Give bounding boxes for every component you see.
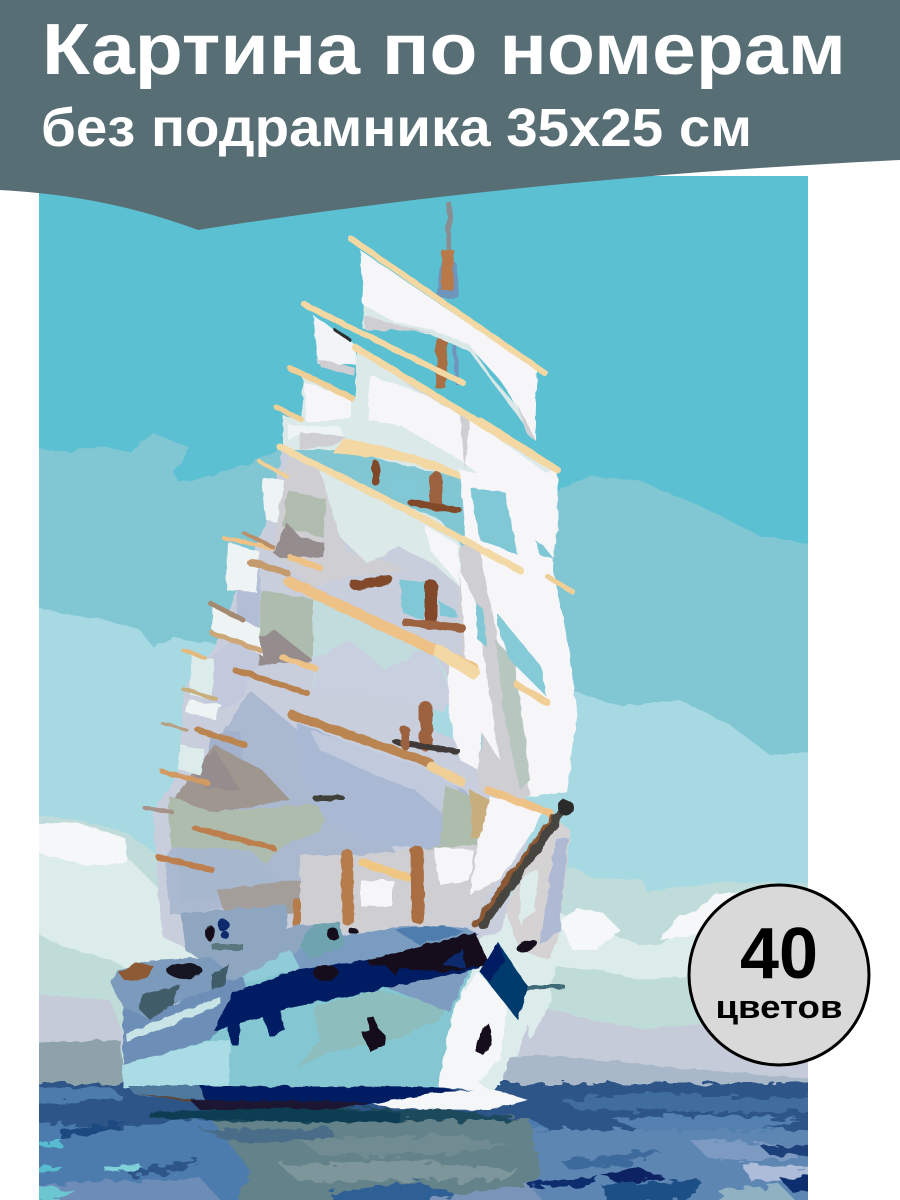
navy stripe on hull: [213, 935, 480, 1045]
yards: [145, 238, 573, 878]
badge: 40 colours: [689, 885, 869, 1065]
sky clouds: [20, 433, 825, 1100]
badge: 40 colours: 40: [740, 914, 818, 994]
anchors and portholes: [205, 919, 539, 1056]
bowsprit: [475, 800, 574, 925]
gaps of sky through the sails: [393, 473, 555, 750]
hull light blue body: [123, 960, 477, 1088]
navy bow panel: [480, 942, 565, 1020]
ship: [110, 202, 577, 1122]
subtitle: без подрамника 35х25 см: [41, 98, 752, 158]
stern: [110, 944, 243, 1020]
black rail section: [313, 932, 490, 981]
central sail one: [273, 457, 460, 587]
right hanging white sails: [455, 470, 577, 810]
central sail two: [313, 592, 482, 770]
central sail three: [296, 722, 492, 860]
white bow: [438, 972, 508, 1091]
painting: sailing ship: [20, 176, 830, 1200]
mast top: [436, 202, 460, 388]
sails: small left sails: [178, 478, 290, 775]
waterline and foam: [128, 1086, 528, 1122]
title: Картина по номерам: [42, 10, 846, 90]
sails: rear left mass: [153, 450, 530, 965]
white jib sails near bow: [300, 797, 570, 1040]
hull upper deck: [219, 922, 480, 982]
masts: [297, 329, 462, 925]
upper sails and main white sail: [283, 315, 558, 530]
header banner: [0, 0, 900, 230]
top royal sail: [360, 250, 537, 440]
sea: [20, 1083, 830, 1200]
badge: 40 colours: цветов: [716, 989, 842, 1025]
